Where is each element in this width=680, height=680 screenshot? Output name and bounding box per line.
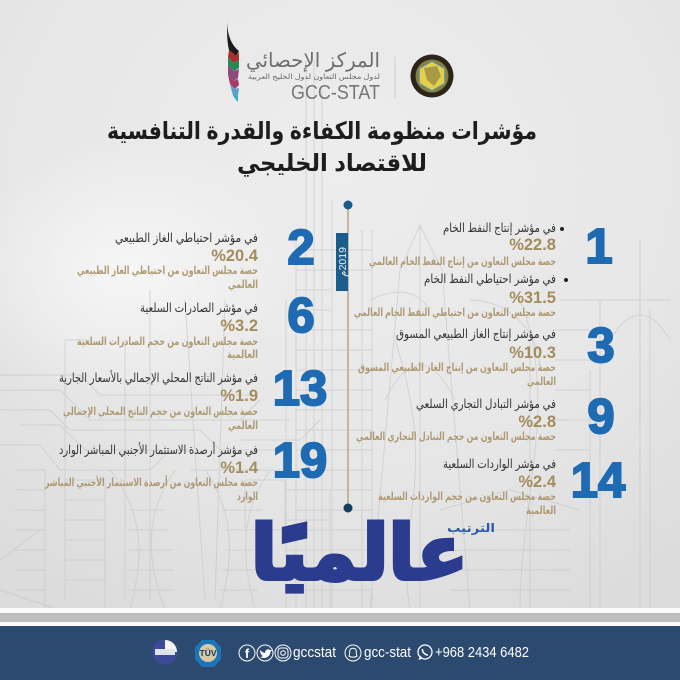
rank 2: natural gas reserves: [77, 221, 315, 291]
icon: whatsapp: [418, 645, 432, 660]
rank 19: inward FDI stock: %1.4: [220, 459, 259, 477]
rank 6: merchandise exports: في مؤشر الصادرات السلعية: [140, 301, 258, 316]
rank 6: merchandise exports: [77, 289, 315, 361]
title: [107, 118, 537, 177]
rank 14: merchandise imports: حصة مجلس التعاون من حجم الواردات السلعية: [378, 491, 556, 503]
logo: GCC-STAT: [227, 20, 380, 104]
handle: gccstat: gccstat: [293, 645, 336, 661]
rank 13: GDP at current prices: في مؤشر الناتج المحلي الإجمالي بالأسعار الجارية: [59, 370, 258, 386]
rank 13: GDP at current prices: العالمي: [228, 420, 258, 432]
icon: facebook: f: [245, 646, 250, 661]
phone number: +968 2434 6482: [435, 645, 529, 661]
rank 2: natural gas reserves: العالمي: [228, 279, 258, 291]
rank 3: marketed natural gas: العالمي: [527, 376, 556, 388]
rank 9: merchandise trade: في مؤشر التبادل التجاري السلعي: [416, 397, 556, 412]
rank 9: merchandise trade: [356, 390, 615, 444]
rank 1: crude oil reserves: %31.5: [509, 289, 556, 307]
icon: TUV badge: TÜV: [200, 648, 217, 658]
logo: GCC-STAT wordmark: GCC-STAT: [291, 82, 380, 104]
icon: snapchat: [345, 645, 361, 661]
handle: gcc-stat: gcc-stat: [364, 645, 411, 661]
rank 1: crude oil production: حصة مجلس التعاون من إنتاج النفط الخام العالمي: [369, 256, 556, 269]
rank 1: crude oil reserves: في مؤشر احتياطي النفط الخام: [424, 272, 556, 287]
rank 3: marketed natural gas: 3: [587, 319, 615, 373]
logo: Arabic name: المركز الإحصائي: [246, 50, 380, 73]
rank 14: merchandise imports: في مؤشر الواردات السلعية: [443, 457, 556, 472]
rank 9: merchandise trade: حصة مجلس التعاون من حجم التبادل التجاري العالمي: [356, 431, 556, 443]
rank 13: GDP at current prices: 13: [273, 362, 327, 416]
rank 13: GDP at current prices: %1.9: [220, 387, 258, 405]
rank 6: merchandise exports: 6: [287, 289, 315, 343]
rank 13: GDP at current prices: [59, 362, 327, 432]
rank 1: crude oil reserves: حصة مجلس التعاون من احتياطي النفط الخام العالمي: [354, 307, 556, 319]
rank 14: merchandise imports: 14: [571, 454, 625, 508]
rank 19: inward FDI stock: في مؤشر أرصدة الاستثمار الأجنبي المباشر الوارد: [59, 441, 258, 458]
rank 3: marketed natural gas: %10.3: [509, 344, 556, 362]
rank 14: merchandise imports: %2.4: [518, 473, 557, 491]
rank 6: merchandise exports: حصة مجلس التعاون من حجم الصادرات السلعية: [77, 336, 258, 348]
icon: certification seal: [152, 640, 178, 664]
rank 2: natural gas reserves: 2: [287, 221, 315, 275]
rank 1: crude oil production: 1: [585, 220, 613, 274]
rank 2: natural gas reserves: حصة مجلس التعاون من احتياطي الغاز الطبيعي: [77, 265, 258, 277]
rank 1: crude oil production: [369, 220, 613, 274]
rank 14: merchandise imports: العالمية: [526, 505, 556, 517]
logo: Arabic subtitle: لدول مجلس التعاون لدول الخليج العربية: [248, 74, 380, 81]
footer: [0, 626, 680, 680]
title: للاقتصاد الخليجي: [237, 150, 427, 177]
rank 9: merchandise trade: 9: [587, 390, 615, 444]
rank 3: marketed natural gas: حصة مجلس التعاون من إنتاج الغاز الطبيعي المسوق: [358, 362, 556, 375]
footer bands: [0, 608, 680, 626]
background line art: skyline and circuits: [0, 60, 670, 610]
rank 1: crude oil production: %22.8: [509, 236, 556, 254]
rank 1: crude oil production: في مؤشر إنتاج النفط الخام: [443, 221, 556, 236]
timeline: [336, 200, 352, 512]
rank 19: inward FDI stock: 19: [273, 434, 327, 488]
rank 3: marketed natural gas: [358, 319, 615, 388]
label: ranking: الترتيب: [447, 521, 495, 535]
logo: ribbon stripes: [227, 20, 239, 102]
rank 6: merchandise exports: %3.2: [220, 317, 258, 335]
icon: instagram: [275, 645, 291, 661]
rank 2: natural gas reserves: في مؤشر احتياطي الغاز الطبيعي: [115, 231, 258, 246]
rank 13: GDP at current prices: حصة مجلس التعاون من حجم الناتج المحلي الإجمالي: [63, 406, 258, 418]
rank 6: merchandise exports: العالمية: [227, 349, 258, 361]
rank 19: inward FDI stock: [44, 434, 327, 503]
rank 2: natural gas reserves: %20.4: [211, 247, 259, 265]
rank 1: crude oil reserves: [354, 272, 568, 319]
rank 9: merchandise trade: %2.8: [518, 413, 556, 431]
rank 19: inward FDI stock: الوارد: [237, 491, 258, 503]
icon: GCC emblem: [410, 54, 454, 98]
icon: facebook: [239, 645, 255, 661]
icon: twitter: [257, 645, 273, 661]
rank 14: merchandise imports: [378, 454, 625, 517]
year ribbon: 2019م: [337, 247, 349, 277]
rank 19: inward FDI stock: حصة مجلس التعاون من أرصدة الاستثمار الأجنبي المباشر: [44, 475, 258, 489]
title: مؤشرات منظومة الكفاءة والقدرة التنافسية: [107, 118, 537, 145]
year ribbon: [336, 233, 349, 291]
big word: globally: عالميًا: [251, 511, 468, 596]
icon: TUV badge: [195, 640, 221, 667]
rank 3: marketed natural gas: في مؤشر إنتاج الغاز الطبيعي المسوق: [396, 327, 556, 342]
